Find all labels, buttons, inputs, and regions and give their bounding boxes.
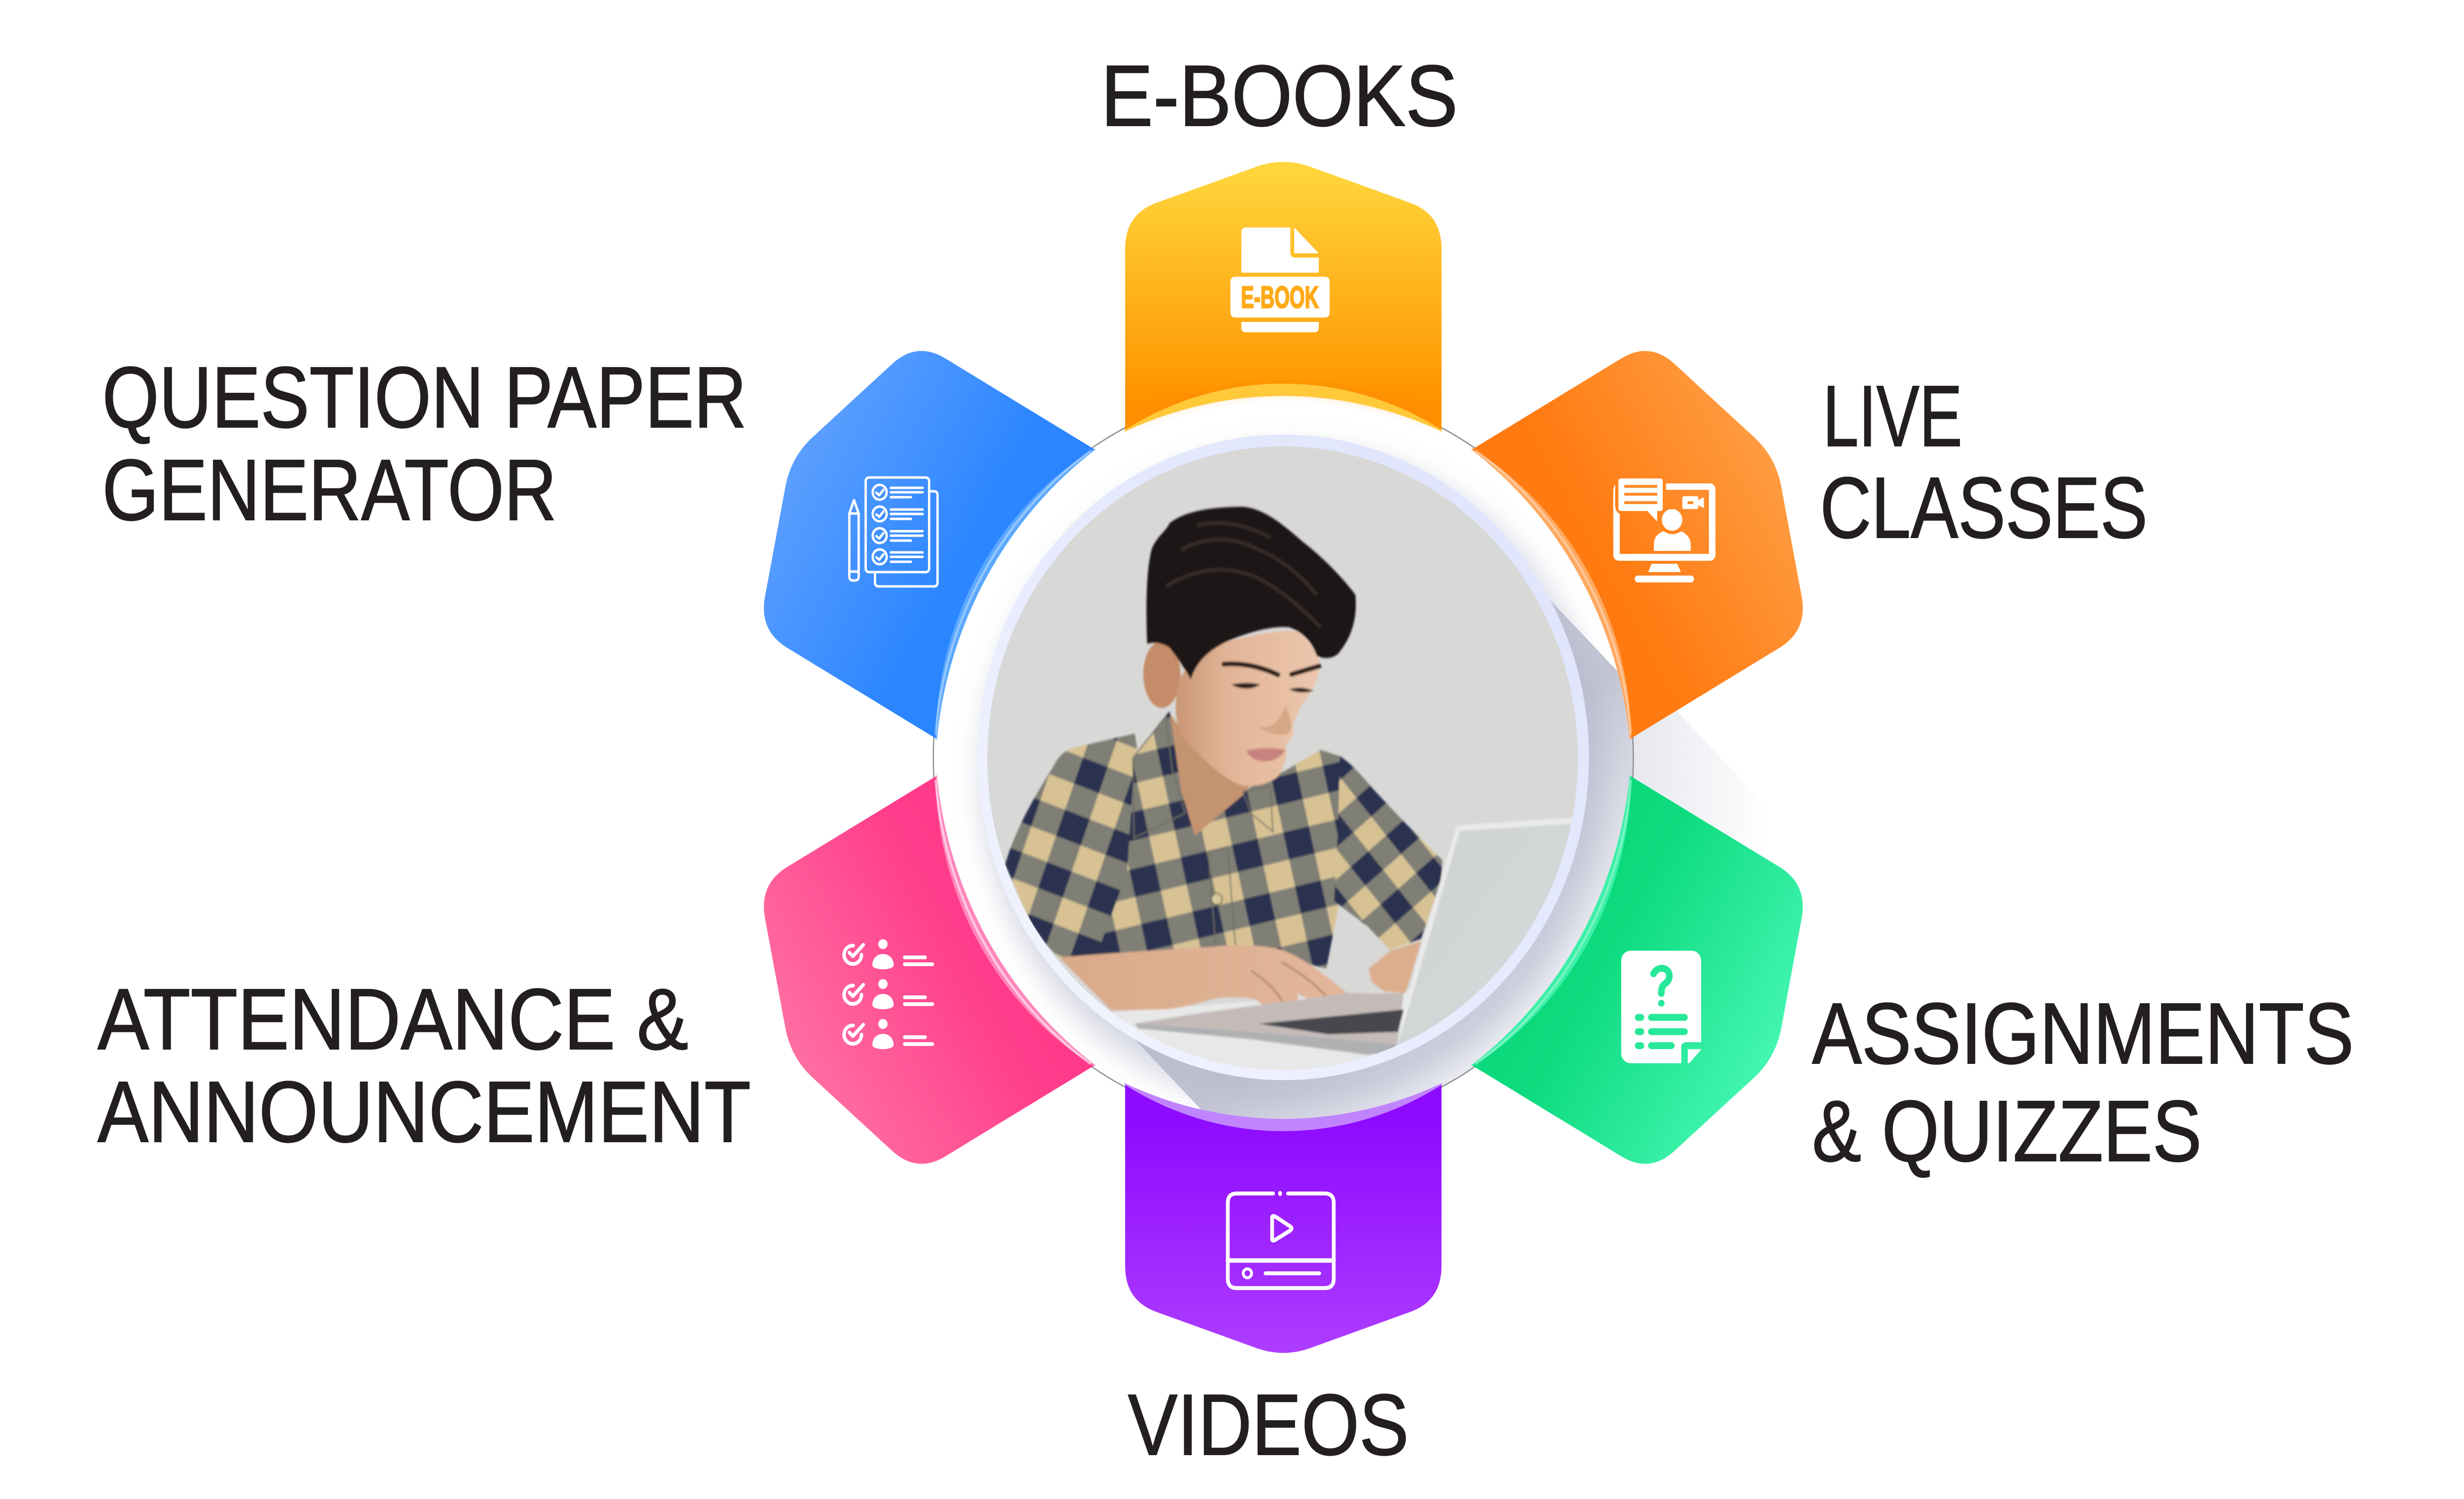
photo: boy using a laptop (980, 443, 1587, 1081)
hexagon: orange (1472, 315, 1851, 739)
laptop lid rim (1398, 818, 1576, 1044)
shirt button (1211, 893, 1222, 905)
heading: attendance and announcement: ATTENDANCE & (98, 971, 688, 1068)
heading: assignments and quizzes: ASSIGNMENTS (1812, 986, 2354, 1082)
left arm and hand (1060, 945, 1350, 1022)
hair (1146, 507, 1356, 680)
hexagon: green (1472, 776, 1851, 1200)
thin outer circle line (933, 388, 1633, 1127)
hexagon: pink (716, 776, 1095, 1200)
hexagon: purple (1125, 1084, 1441, 1353)
heading: attendance and announcement (98, 971, 751, 1160)
nose shadow (1257, 705, 1291, 735)
icon: attendance list (844, 939, 934, 1049)
icon: question paper checklist (849, 477, 937, 586)
finger shading (1251, 962, 1336, 1016)
soft shadow around the photo ring (981, 448, 1605, 1106)
eyes (1231, 683, 1314, 692)
face (1176, 631, 1320, 786)
panel: e-books hexagon (1125, 162, 1441, 431)
photo subject (1005, 507, 1584, 1081)
heading: question paper generator (102, 349, 747, 539)
shirt collar and placket (1133, 716, 1273, 950)
heading: videos: VIDEOS (1128, 1377, 1409, 1473)
laptop front edge (1135, 1023, 1396, 1055)
keyboard (1259, 1009, 1403, 1034)
neck (1169, 713, 1251, 838)
icon: e-book file (1231, 228, 1330, 332)
panel: videos hexagon (1125, 1084, 1441, 1353)
heading: assignments and quizzes: & QUIZZES (1812, 1083, 2202, 1180)
ear (1143, 641, 1180, 708)
icon: video player (1228, 1193, 1334, 1288)
heading: e-books: E-BOOKS (1101, 48, 1458, 144)
hair highlights (1166, 523, 1321, 627)
eyebrows (1224, 664, 1319, 675)
panel: attendance and announcement hexagon (716, 776, 1095, 1200)
shirt torso (1096, 711, 1348, 969)
lavender ring around photo (978, 435, 1589, 1080)
heading: live classes: LIVE (1823, 368, 1962, 465)
panel: question paper generator hexagon (716, 315, 1095, 739)
hexagon: blue (716, 315, 1095, 739)
icon: live class monitor (1613, 478, 1715, 582)
laptop base (1134, 993, 1403, 1055)
photo background (980, 443, 1587, 1081)
icon: question document (1621, 951, 1702, 1063)
outer wedge of the long shadow (1619, 650, 1820, 867)
hexagon: yellow (1125, 162, 1441, 431)
shirt left sleeve (1005, 734, 1146, 959)
laptop lid (1396, 818, 1584, 1081)
panel: live classes hexagon (1472, 315, 1851, 739)
right hand (1369, 941, 1421, 993)
heading: assignments and quizzes (1812, 986, 2354, 1180)
heading: attendance and announcement: ANNOUNCEMENT (98, 1064, 751, 1160)
heading: live classes (1820, 368, 2148, 556)
icon: e-book file: E-BOOK (1241, 280, 1319, 314)
heading: live classes: CLASSES (1820, 460, 2148, 556)
lips (1246, 748, 1286, 761)
heading: question paper generator: QUESTION PAPER (102, 349, 747, 446)
table (1096, 989, 1584, 1081)
long diagonal shadow of the central circle (1134, 600, 1633, 1119)
panel: assignments and quizzes hexagon (1472, 776, 1851, 1200)
heading: question paper generator: GENERATOR (102, 442, 557, 539)
shirt right sleeve (1334, 756, 1442, 950)
